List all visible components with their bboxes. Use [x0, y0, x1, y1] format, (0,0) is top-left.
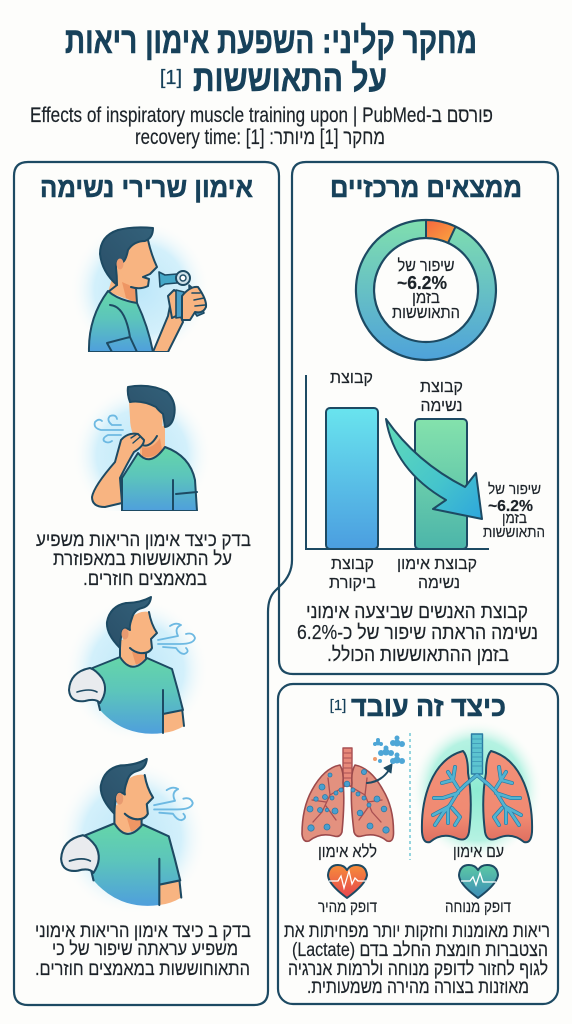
bar chart: control vs training group: קבוצת: [331, 554, 374, 573]
icon: man pinching nose and breathing out: [83, 384, 202, 511]
icon: lungs with training: [411, 720, 543, 860]
donut chart: improvement of 6.2 percent: ~6.2%: [397, 273, 447, 293]
text block: findings summary: [297, 601, 538, 666]
text block: first study description: על התאוששות במאפוזרת: [53, 549, 232, 570]
bar: training group: [415, 419, 467, 549]
icon: heart fast pulse: [328, 865, 367, 898]
callout: improvement of 6.2 percent: ~6.2%: [488, 498, 533, 515]
icon: man breathing out with towel: [65, 597, 209, 742]
text block: second study description: בדק ב כיצד אימון הריאות אימוני: [35, 921, 251, 942]
donut chart: improvement of 6.2 percent: שיפור של: [398, 256, 454, 275]
panel: key findings: [297, 172, 545, 666]
arrow: decrease in recovery time: [386, 419, 482, 519]
panel outline: left and findings panels with crossing edge: [14, 162, 558, 1005]
bar chart: control vs training group: נשימה: [420, 396, 462, 415]
bar chart: control vs training group: נשימה: [418, 573, 460, 592]
panel: how it works: [278, 684, 558, 1004]
heading: key findings: ממצאים מרכזיים: [330, 172, 522, 203]
text block: second study description: משפיע עראתה שיפור של כי: [52, 939, 238, 960]
icon: lungs without training: [302, 736, 405, 841]
divider: [409, 733, 411, 860]
text block: first study description: [36, 530, 251, 590]
text block: second study description: התאוחוששות במאמצים חוזרים.: [35, 959, 250, 980]
callout: improvement of 6.2 percent: התאוששות: [483, 524, 545, 541]
heading: how it works: [1]: [330, 697, 346, 714]
label: resting pulse: דופק מנוחה: [445, 899, 511, 916]
text block: second study description: [35, 921, 251, 980]
donut chart: improvement of 6.2 percent: בזמן: [412, 288, 440, 307]
icon: man using inspiratory trainer device: [81, 226, 208, 352]
heading: how it works: כיצד זה עובד: [351, 691, 506, 722]
subtitle: פורסם ב-Effects of inspiratory muscle training upon | PubMed: [30, 104, 493, 127]
callout: improvement of 6.2 percent: שיפור של: [488, 481, 541, 498]
donut chart: improvement of 6.2 percent: התאוששות: [392, 303, 460, 322]
icon: man breathing out after exercise: [57, 759, 207, 915]
label: fast pulse: דופק מהיר: [318, 899, 377, 916]
panel frame: [278, 684, 558, 1004]
label: with training: עם אימון: [453, 842, 504, 861]
text block: findings summary: בזמן ההתאוששות הכולל.: [327, 644, 509, 666]
bar chart: control vs training group: [306, 368, 489, 592]
bar chart: control vs training group: ביקורת: [329, 573, 376, 592]
subtitle: [30, 104, 493, 149]
subtitle: מחקר [1] מיותר: ⁦recovery time: [1]⁩: [135, 126, 385, 149]
callout: improvement of 6.2 percent: [483, 481, 545, 541]
panel: breathing muscle training: [35, 172, 253, 980]
icon: heart resting pulse: [459, 865, 498, 898]
bar chart: control vs training group: קבוצת: [420, 377, 463, 396]
heading: breathing muscle training: אימון שרירי נשימה: [40, 172, 253, 203]
bar chart: control vs training group: קבוצת: [330, 368, 373, 387]
text block: mechanism explanation: [284, 921, 550, 998]
text block: findings summary: נשימה הראתה שיפור של כ-6.2%: [297, 622, 538, 644]
particles: lactate leaving lungs: [373, 736, 405, 764]
title: [65, 20, 477, 99]
callout: improvement of 6.2 percent: בזמן: [502, 510, 527, 527]
text block: first study description: בדק כיצד אימון הריאות משפיע: [36, 530, 251, 551]
text block: mechanism explanation: מאוזנות בצורה מהירה משמעותית.: [307, 977, 529, 998]
label: without training: ללא אימון: [318, 842, 377, 861]
donut chart: improvement of 6.2 percent: [356, 220, 496, 360]
title: על התאוששות: [193, 58, 387, 99]
bar chart: control vs training group: קבוצת אימון: [397, 554, 477, 573]
text block: findings summary: קבוצת האנשים שביצעה אימוני: [306, 601, 528, 623]
bar: control group: [326, 408, 378, 549]
text block: first study description: במאמצים חוזרים.: [83, 569, 207, 590]
title: [1]: [160, 67, 182, 89]
